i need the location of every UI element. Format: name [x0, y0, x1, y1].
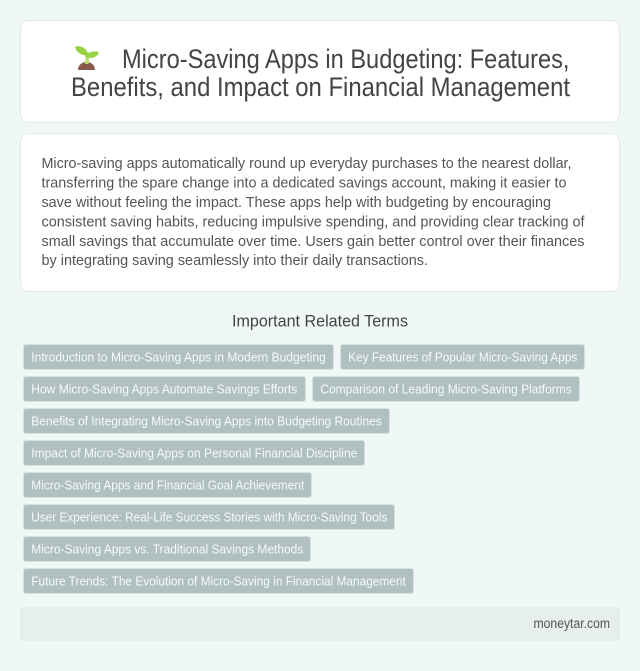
- tag 10: Future Trends: The Evolution of Micro-Saving in Financial Management: [31, 574, 406, 588]
- icon: seedling: [75, 46, 99, 70]
- tag 1: Introduction to Micro-Saving Apps in Modern Budgeting: [31, 350, 326, 364]
- tag 9: [24, 536, 310, 562]
- tag 5: [24, 408, 390, 434]
- tag 8: User Experience: Real-Life Success Stories with Micro-Saving Tools: [31, 510, 388, 524]
- footer: moneytar.com: [534, 616, 610, 631]
- heading: related terms: Important Related Terms: [232, 312, 408, 330]
- tag 2: [340, 344, 584, 370]
- tag 4: [312, 376, 580, 402]
- footer: [20, 607, 620, 641]
- text block: description: transferring the spare change into a dedicated savings account, making it easier to: [42, 174, 566, 192]
- tag 8: [24, 504, 394, 530]
- tag 1: [24, 344, 334, 370]
- tag 9: Micro-Saving Apps vs. Traditional Savings Methods: [31, 542, 304, 556]
- tag 2: Key Features of Popular Micro-Saving Apps: [348, 350, 578, 364]
- title: Benefits, and Impact on Financial Management: [71, 72, 571, 102]
- tag 7: Micro-Saving Apps and Financial Goal Achievement: [31, 478, 305, 492]
- tag 6: [24, 440, 364, 466]
- tag list: [24, 344, 584, 594]
- tag 3: How Micro-Saving Apps Automate Savings Efforts: [31, 382, 298, 396]
- title: Micro-Saving Apps in Budgeting: Features,: [122, 44, 570, 74]
- tag 4: Comparison of Leading Micro-Saving Platforms: [320, 382, 572, 396]
- text block: description: save without feeling the impact. These apps help with budgeting by encouraging: [42, 194, 551, 211]
- text block: description: small savings that accumulate over time. Users gain better control over their finances: [42, 233, 584, 250]
- title: [71, 44, 571, 102]
- panel: description: [20, 134, 620, 292]
- tag 5: Benefits of Integrating Micro-Saving Apps into Budgeting Routines: [31, 414, 382, 428]
- text block: description: [42, 155, 585, 269]
- tag 3: [24, 376, 306, 402]
- text block: description: Micro-saving apps automatically round up everyday purchases to the nearest dollar,: [42, 155, 572, 172]
- tag 7: [24, 472, 312, 498]
- panel: title card: [20, 20, 620, 122]
- text block: description: consistent saving habits, reducing impulsive spending, and providing clear tracking of: [42, 214, 585, 230]
- text block: description: by integrating saving seamlessly into their daily transactions.: [42, 252, 428, 269]
- tag 10: [24, 568, 414, 594]
- tag 6: Impact of Micro-Saving Apps on Personal Financial Discipline: [31, 446, 357, 460]
